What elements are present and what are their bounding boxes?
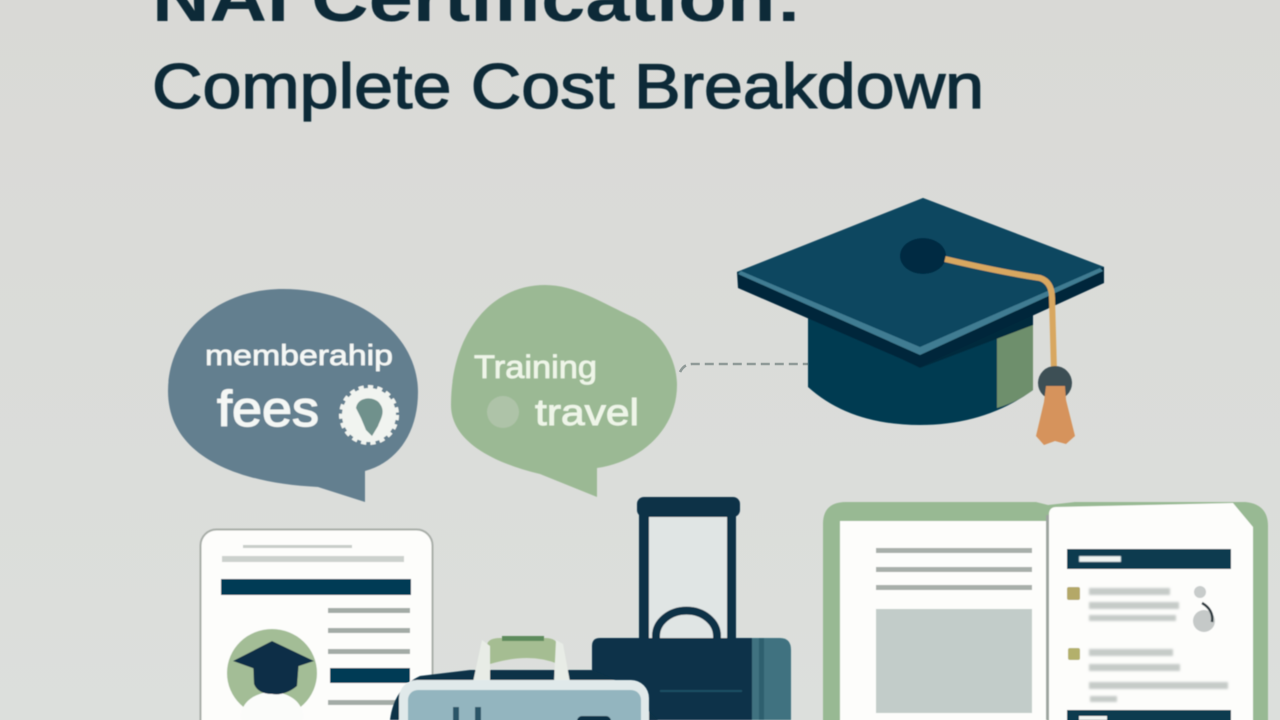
icon: graduation cap xyxy=(737,198,1104,445)
tassel cord xyxy=(945,259,1054,372)
icon: small dial xyxy=(1193,586,1215,632)
speech bubble: membership fees: memberahip xyxy=(205,340,393,372)
left page xyxy=(840,521,1047,720)
speech bubble: training and travel xyxy=(451,285,677,497)
rolling suitcase xyxy=(592,497,791,720)
title: Complete Cost Breakdown xyxy=(152,52,984,122)
speech bubble: training and travel: Training xyxy=(474,349,597,385)
icon: graduate portrait xyxy=(227,629,317,720)
cap body xyxy=(808,312,1033,425)
cap board xyxy=(737,198,1104,367)
title xyxy=(152,0,984,122)
document card xyxy=(200,530,432,720)
right page xyxy=(1049,503,1253,720)
icon: seal badge xyxy=(342,388,396,442)
open book xyxy=(823,502,1268,720)
speech bubble: training and travel: travel xyxy=(535,392,639,433)
speech bubble: membership fees: fees xyxy=(217,381,319,437)
icon: faded travel mark xyxy=(487,396,519,428)
carry bag xyxy=(390,636,658,720)
dashed connector xyxy=(680,364,808,372)
speech bubble: membership fees xyxy=(168,289,418,502)
